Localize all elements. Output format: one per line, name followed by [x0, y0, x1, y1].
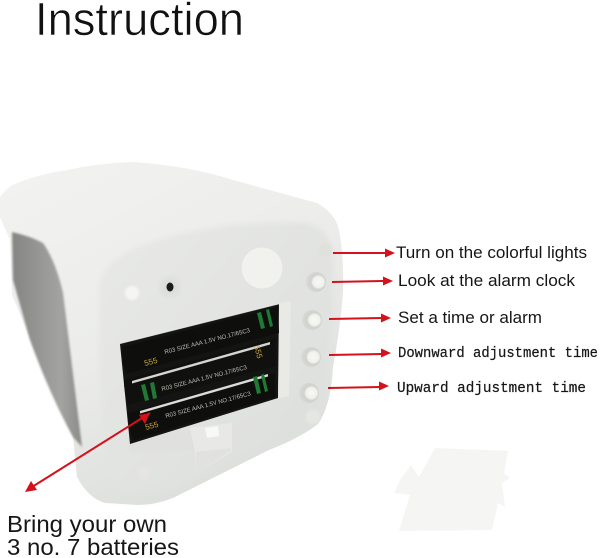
small hole	[160, 277, 180, 297]
latch tab	[190, 423, 232, 473]
lower frame below compartment	[129, 398, 288, 453]
arrow: upward	[328, 382, 389, 390]
round cap	[241, 247, 283, 289]
battery 2: R03 SIZE AAA 1.5V NO.17/65C3	[161, 365, 248, 393]
label: upward: Upward adjustment time	[397, 381, 586, 397]
battery 1: R03 SIZE AAA 1.5V NO.17/65C3	[164, 328, 251, 356]
label: alarm clock: Look at the alarm clock	[398, 271, 575, 290]
arrow: alarm clock	[332, 276, 393, 286]
battery cover	[394, 448, 510, 531]
battery 3: 555	[144, 420, 160, 432]
button flat bottom	[306, 410, 320, 424]
battery 2: 555	[252, 344, 264, 360]
side display window	[12, 232, 82, 447]
clock cube, back view	[0, 162, 343, 505]
compartment opening	[120, 304, 280, 444]
arrow: batteries	[25, 413, 150, 492]
dimple bottom left	[138, 467, 150, 479]
label: batteries: Bring your own	[7, 511, 167, 537]
button: upward	[299, 383, 319, 403]
dimple top left	[125, 286, 139, 300]
label: set time: Set a time or alarm	[398, 308, 542, 327]
back face shading	[99, 222, 333, 493]
button: set time	[302, 310, 322, 330]
arrow: set time	[329, 314, 391, 322]
battery 3: R03 SIZE AAA 1.5V NO.17/65C3	[165, 391, 252, 420]
battery 1	[122, 307, 279, 374]
battery 2	[124, 338, 276, 405]
cube body	[0, 162, 343, 505]
battery 1: 555	[143, 356, 159, 368]
arrow: colorful lights	[333, 248, 395, 258]
button: look at alarm	[306, 272, 326, 292]
button flat top	[318, 243, 332, 257]
arrow: downward	[329, 348, 391, 358]
button: downward	[301, 347, 321, 367]
label: colorful lights: Turn on the colorful lights	[396, 243, 587, 262]
battery 3	[128, 373, 275, 440]
battery compartment	[120, 301, 291, 444]
